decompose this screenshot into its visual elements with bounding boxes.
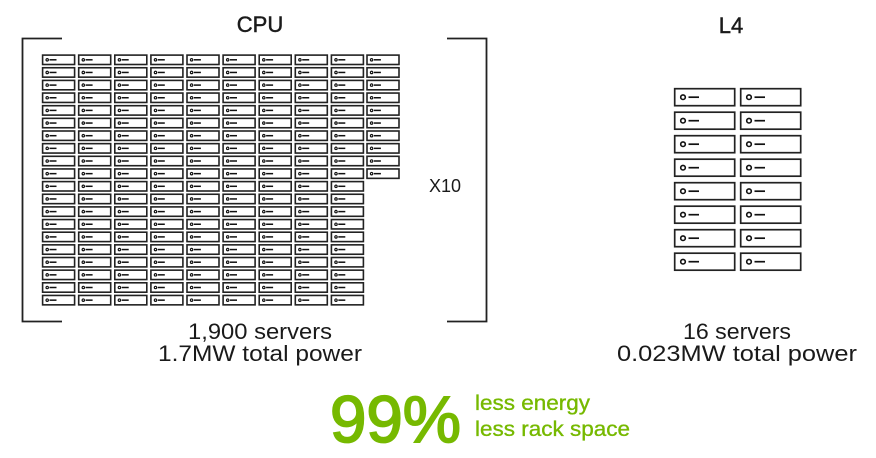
right bracket (447, 38, 486, 322)
CPU stats: 1.7MW total power (158, 341, 363, 366)
savings text: less energy (475, 391, 590, 415)
L4 stats (617, 319, 858, 366)
heading: CPU: CPU (237, 12, 283, 37)
savings text: less rack space (475, 417, 630, 441)
big percentage: 99% (330, 382, 461, 456)
multiplier label: X10 (429, 176, 461, 196)
CPU server grid (43, 55, 399, 305)
savings text (475, 391, 630, 441)
CPU stats: 1,900 servers (188, 319, 332, 344)
heading: L4: L4 (719, 13, 743, 38)
L4 server grid (675, 89, 801, 270)
L4 stats: 0.023MW total power (617, 341, 858, 366)
CPU stats (158, 319, 363, 366)
left bracket (22, 38, 62, 322)
L4 stats: 16 servers (683, 319, 791, 344)
